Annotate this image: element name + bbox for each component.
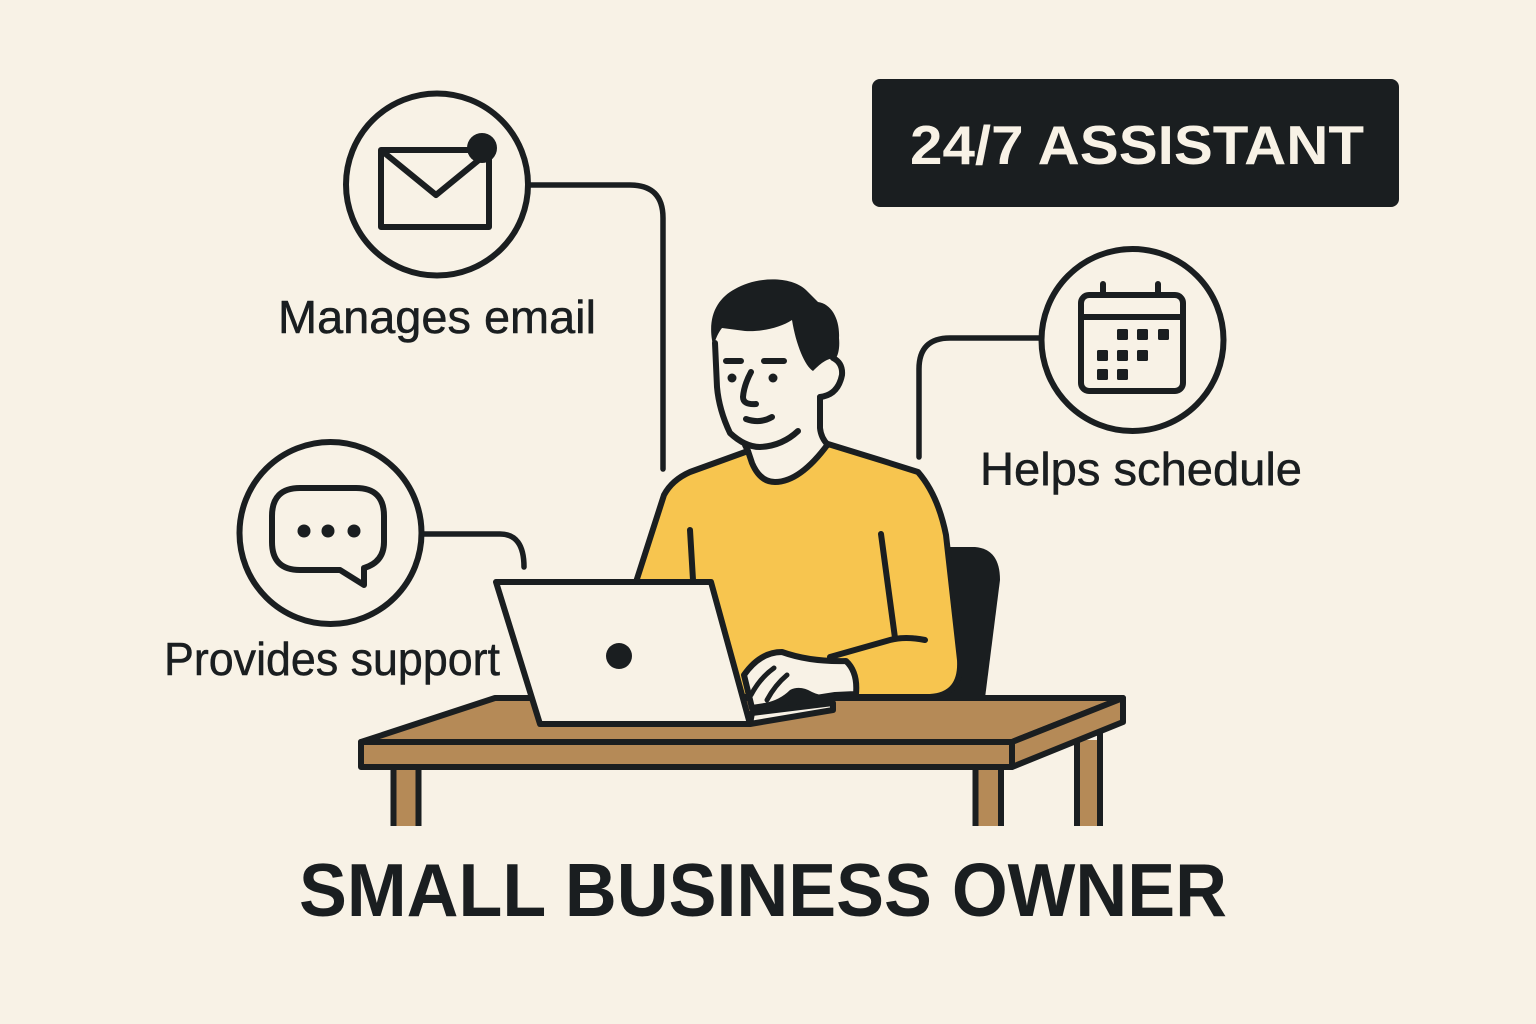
connector: schedule: [919, 338, 1040, 457]
badge: 24/7 assistant: 24/7 ASSISTANT: [910, 114, 1364, 176]
icon: chat circle: [240, 442, 422, 624]
label: manages email: Manages email: [278, 291, 596, 343]
hair: [711, 279, 839, 371]
connector: support: [422, 534, 524, 567]
face details: [726, 361, 784, 421]
label: provides support: Provides support: [164, 633, 500, 685]
icon: calendar circle: [1042, 249, 1224, 431]
ear: [820, 358, 842, 397]
icon: email circle: [346, 94, 528, 276]
sweater: [636, 444, 960, 697]
laptop: [496, 582, 833, 724]
person: [636, 279, 960, 713]
title: SMALL BUSINESS OWNER: [299, 848, 1227, 932]
head outline: [715, 343, 828, 451]
connector: email: [530, 185, 663, 469]
label: helps schedule: Helps schedule: [980, 443, 1302, 495]
hand: [744, 652, 856, 713]
sleeve lines: [690, 530, 925, 657]
desk: [361, 698, 1123, 826]
chair: [945, 547, 1000, 698]
badge: 24/7 assistant: [872, 79, 1399, 207]
